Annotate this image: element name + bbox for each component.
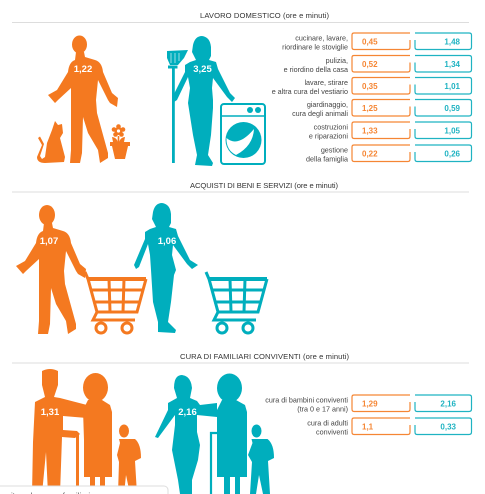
figure: woman shopping: 1,06 xyxy=(158,236,176,247)
row: cucinare: riordinare le stoviglie xyxy=(282,42,348,52)
row: gestione: 0,26 xyxy=(444,150,461,158)
row: giardinaggio: giardinaggio, xyxy=(307,100,348,109)
row: bambini: 2,16 xyxy=(440,400,457,408)
row: lavare: e altra cura del vestiario xyxy=(272,87,348,96)
row: lavare: 1,01 xyxy=(444,82,461,91)
title: acquisti: ACQUISTI DI BENI E SERVIZI (ore e minuti) xyxy=(190,181,338,190)
row: lavare: 0,35 xyxy=(362,82,378,91)
row: pulizia xyxy=(284,56,472,74)
row: pulizia: 1,34 xyxy=(444,60,461,69)
row: bambini: 1,29 xyxy=(362,400,378,408)
row: gestione: gestione xyxy=(321,146,348,154)
row: adulti: cura di adulti xyxy=(307,418,348,428)
row: costruzioni: costruzioni xyxy=(314,122,348,132)
row: adulti: 0,33 xyxy=(440,422,457,432)
row: pulizia: e riordino della casa xyxy=(284,65,348,74)
row: gestione xyxy=(306,145,472,164)
table: domestic rows xyxy=(272,33,472,164)
icon: orange cart xyxy=(85,272,146,333)
icon: mop xyxy=(167,50,188,163)
icon: cat xyxy=(37,121,65,163)
title: cura familiari: CURA DI FAMILIARI CONVIVENTI (ore e minuti) xyxy=(180,352,349,361)
icon: washing machine xyxy=(221,104,265,164)
row: adulti: conviventi xyxy=(316,428,348,436)
row: giardinaggio xyxy=(292,100,472,118)
figure: woman shopping xyxy=(134,203,198,333)
row: bambini: cura di bambini conviventi xyxy=(265,396,348,404)
icon: flower pot xyxy=(110,124,130,159)
row: adulti xyxy=(307,418,472,436)
row: giardinaggio: 1,25 xyxy=(362,104,378,113)
icon: teal cart xyxy=(206,272,267,333)
row: bambini: (tra 0 e 17 anni) xyxy=(297,404,348,414)
row: giardinaggio: cura degli animali xyxy=(292,109,348,118)
row: cucinare: 1,48 xyxy=(444,38,461,46)
figure: woman domestic xyxy=(172,36,235,166)
row: bambini xyxy=(265,395,472,414)
title: lavoro domestico: LAVORO DOMESTICO (ore e minuti) xyxy=(200,11,329,20)
figure: man domestic: 1,22 xyxy=(74,64,92,75)
row: pulizia: pulizia, xyxy=(326,56,348,65)
row: pulizia: 0,52 xyxy=(362,60,378,69)
figure: woman domestic: 3,25 xyxy=(193,64,212,75)
table: cura rows xyxy=(265,395,472,436)
figure: man with elder and child: 1,31 xyxy=(41,407,60,418)
row: adulti: 1,1 xyxy=(362,422,374,432)
figure: woman with elder and child xyxy=(155,374,274,494)
row: lavare: lavare, stirare xyxy=(304,78,348,87)
row: cucinare: 0,45 xyxy=(362,38,378,46)
row: gestione: 0,22 xyxy=(362,150,378,158)
row: gestione: della famiglia xyxy=(306,154,348,164)
row: costruzioni xyxy=(309,122,472,140)
figure: man shopping xyxy=(16,205,86,334)
row: cucinare xyxy=(282,33,472,52)
figure: woman with elder and child: 2,16 xyxy=(178,407,197,418)
row: giardinaggio: 0,59 xyxy=(444,104,461,113)
row: costruzioni: 1,05 xyxy=(444,126,461,136)
figure: man shopping: 1,07 xyxy=(40,236,58,247)
row: costruzioni: 1,33 xyxy=(362,126,378,136)
figure: man with elder and child xyxy=(32,369,141,494)
figure: man domestic xyxy=(48,36,118,163)
row: costruzioni: e riparazioni xyxy=(309,132,348,140)
row: cucinare: cucinare, lavare, xyxy=(295,34,348,42)
bottom card xyxy=(0,486,168,494)
row: lavare xyxy=(272,78,472,96)
